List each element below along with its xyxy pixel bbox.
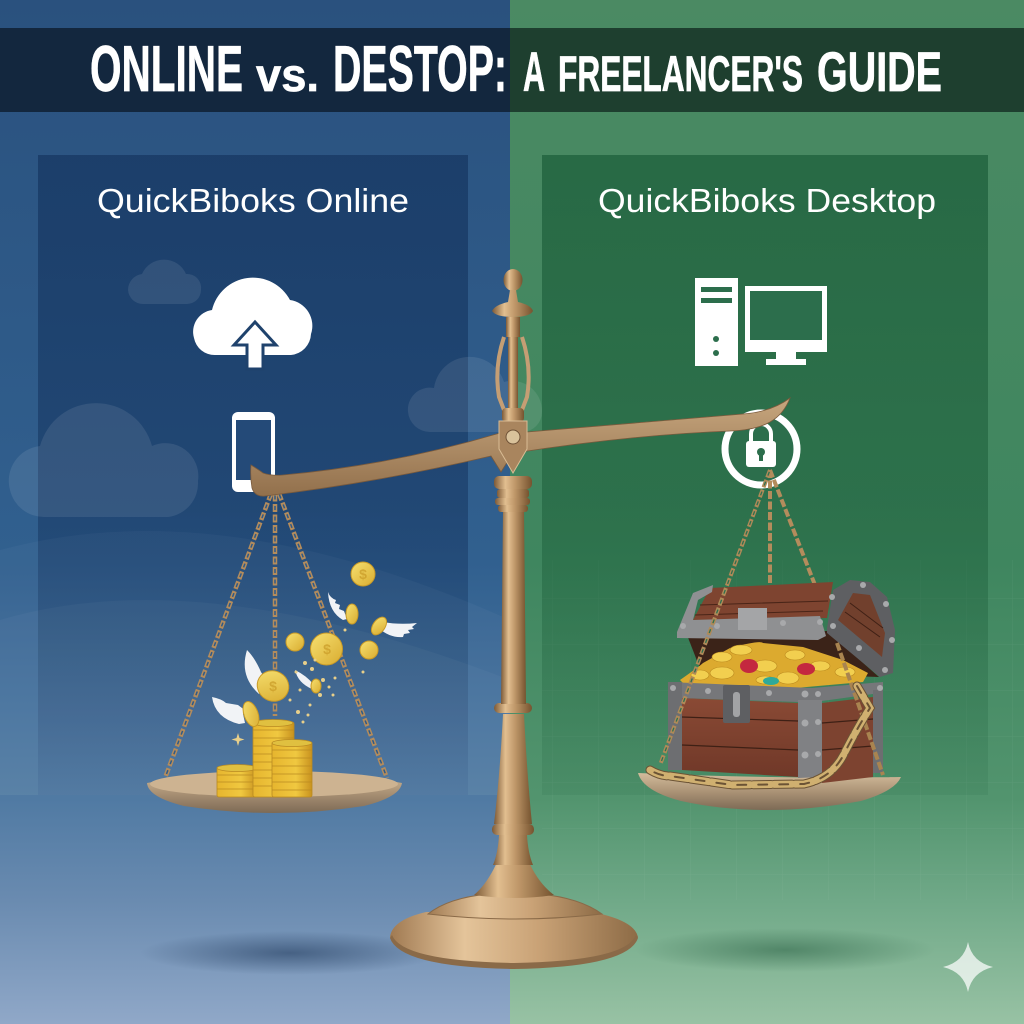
scale: column and base bbox=[390, 476, 638, 969]
chain over chest: right strand bbox=[837, 643, 883, 775]
grid pattern bbox=[542, 560, 1024, 900]
background: right green half bbox=[510, 0, 1024, 1024]
title: ONLINE bbox=[90, 32, 243, 105]
gold coins bbox=[680, 642, 868, 690]
icon: smartphone bbox=[232, 412, 275, 492]
scale: beam bbox=[251, 398, 790, 496]
chest metal straps bbox=[668, 682, 883, 702]
flying coins with wings: $ bbox=[359, 566, 367, 582]
icon: cloud upload bbox=[193, 278, 312, 369]
heavy gold chain around chest bbox=[650, 686, 870, 785]
treasure chest bbox=[668, 580, 895, 783]
icon: padlock in ring bbox=[725, 413, 797, 485]
flying coins with wings bbox=[212, 562, 417, 746]
decorative hills bbox=[0, 531, 510, 795]
icon: desktop computer bbox=[695, 278, 827, 366]
right pan bbox=[638, 773, 901, 810]
chain over chest: left strand bbox=[660, 470, 770, 765]
background: left blue half bbox=[0, 0, 510, 1024]
title bbox=[90, 32, 942, 105]
chest lid interior bbox=[687, 631, 879, 677]
chest lid metal band bbox=[677, 585, 826, 640]
rivets bbox=[670, 582, 895, 758]
left pan bbox=[147, 771, 402, 813]
flying coins with wings: $ bbox=[323, 641, 331, 657]
title: A bbox=[523, 40, 545, 103]
chest lid wood bbox=[693, 582, 833, 620]
scale base shadows bbox=[140, 931, 440, 975]
chains: left pan bbox=[165, 483, 387, 778]
title: GUIDE bbox=[817, 40, 942, 103]
chains: right pan rear bbox=[770, 470, 815, 585]
title: DESTOP: bbox=[333, 32, 507, 105]
title band bbox=[0, 28, 1024, 112]
title: FREELANCER'S bbox=[558, 46, 803, 102]
decorative sparkle bbox=[943, 942, 993, 992]
coin stacks bbox=[217, 720, 312, 797]
heading: QuickBiboks Desktop: QuickBiboks Desktop bbox=[598, 182, 936, 219]
base disc bbox=[390, 911, 638, 967]
background clouds bbox=[9, 260, 542, 517]
panel: QuickBooks Desktop bbox=[542, 155, 988, 795]
panel: QuickBooks Online bbox=[38, 155, 468, 795]
chest lid end cap bbox=[827, 580, 895, 677]
flying coins with wings: $ bbox=[269, 678, 277, 694]
chest front wood bbox=[682, 698, 798, 777]
heading: QuickBiboks Online: QuickBiboks Online bbox=[97, 182, 409, 219]
scale: finial bbox=[492, 269, 533, 422]
title: vs. bbox=[256, 49, 319, 101]
